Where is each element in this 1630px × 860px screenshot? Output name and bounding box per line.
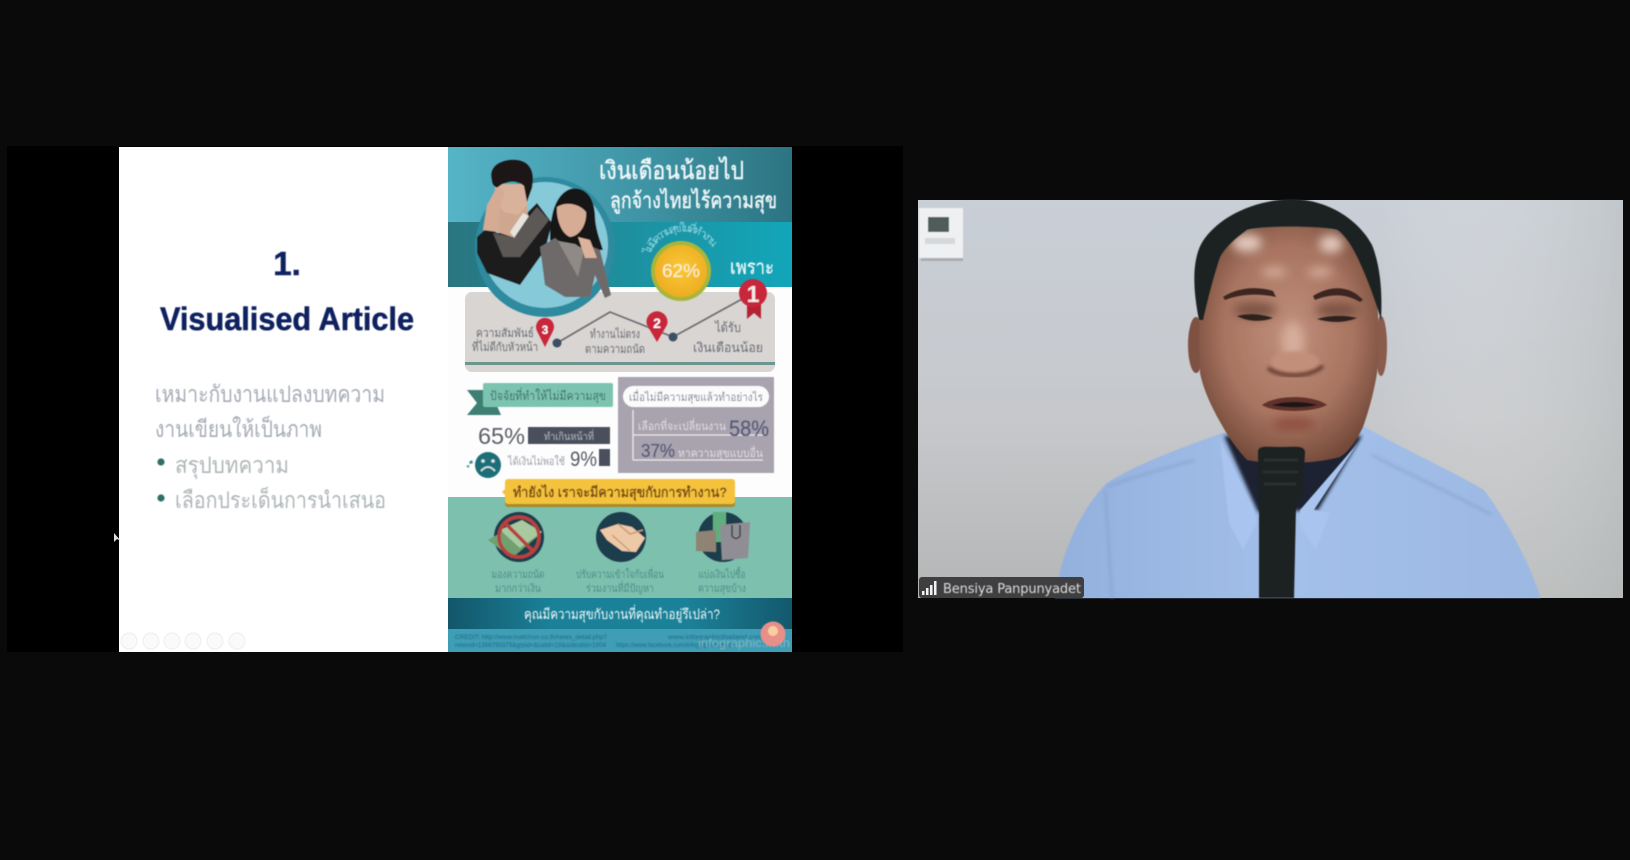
rank labels: ที่ไม่ดีกับหัวหน้า	[472, 338, 538, 354]
ribbon heading: factors	[467, 383, 613, 415]
ears	[1188, 317, 1204, 373]
wall background	[918, 200, 1623, 598]
person	[1055, 199, 1541, 598]
panel: what to do when unhappy: เมื่อไม่มีความสุขแล้วทำอย่างไร	[629, 389, 763, 404]
slide navigation controls	[121, 633, 245, 649]
tip labels: ร่วมงานที่มีปัญหา	[586, 580, 654, 595]
man	[477, 160, 552, 285]
footer credits: https://www.facebook.com/infographicthailand	[616, 642, 736, 649]
green tips section	[448, 497, 792, 598]
rank labels: เงินเดือนน้อย	[693, 340, 763, 355]
ranking line chart	[552, 293, 753, 348]
icon: handshake	[596, 512, 646, 562]
slide letterbox	[7, 146, 903, 652]
mouse cursor	[114, 533, 121, 542]
panel: what to do when unhappy: เลือกที่จะเปลี่ยนงาน	[638, 418, 726, 433]
wall thermostat	[919, 208, 963, 261]
tip labels: ปรับความเข้าใจกับเพื่อน	[576, 566, 664, 581]
shirt	[1055, 427, 1541, 598]
hair	[1194, 199, 1381, 320]
eye socket shadows	[1233, 302, 1359, 318]
tip labels: ความสุขบ้าง	[698, 583, 746, 595]
slide body text: สรุปบทความ	[175, 452, 289, 479]
header band lower	[448, 222, 792, 287]
bar: 65 percent: ทำเกินหน้าที่	[544, 429, 594, 443]
logo badge	[760, 622, 786, 646]
yellow question banner	[502, 479, 735, 507]
white body	[448, 287, 792, 498]
illustration: stressed man and woman in circle	[475, 160, 615, 317]
bar: 9 percent: ได้เงินไม่พอใช้	[507, 455, 565, 468]
slide body text: เลือกประเด็นการนำเสนอ	[175, 485, 386, 513]
bar: 9 percent: 9%	[570, 448, 597, 471]
rank pin 3	[536, 318, 554, 347]
nose	[1268, 322, 1323, 375]
panel: what to do when unhappy: 58%	[729, 416, 769, 441]
slide heading: Visualised Article	[160, 301, 414, 337]
collar	[1220, 440, 1257, 550]
curved label: no happiness at work: ไม่มีความสุขในที่ทำงาน	[640, 221, 717, 253]
rank labels: ได้รับ	[714, 320, 741, 335]
footer credits: newsid=1366793379&grpid=&catid=19&subcatid=1904	[455, 642, 606, 649]
icon: sad face	[466, 452, 501, 478]
panel: shared presentation slide	[7, 146, 903, 652]
face	[1199, 226, 1379, 463]
mouth	[1262, 397, 1327, 431]
infographic	[448, 147, 792, 652]
shirt seams	[1105, 455, 1492, 598]
rank labels: ตามความถนัด	[585, 342, 645, 356]
signal bars icon	[922, 581, 936, 595]
grey ranking panel	[465, 292, 775, 372]
footer credits: infographic.in.th	[698, 636, 790, 650]
bar: 65 percent: 65%	[478, 423, 525, 449]
panel: what to do when unhappy: หาความสุขแบบอื่น	[678, 445, 763, 460]
tip labels: มากกว่าเงิน	[495, 583, 541, 595]
panel: speaker video	[918, 199, 1623, 598]
yellow question banner: ทำยังไง เราจะมีความสุขกับการทำงาน?	[513, 483, 727, 501]
rank labels: ทำงานไม่ตรง	[590, 327, 640, 341]
rank labels: ความสัมพันธ์	[476, 326, 534, 340]
slide heading	[160, 245, 414, 337]
tip labels: แบ่งเงินไปซื้อ	[698, 566, 746, 581]
eyebrows	[1223, 288, 1363, 302]
footer credits: CREDIT: http://www.matichon.co.th/news_detail.php?	[455, 634, 607, 641]
tip labels: มองความถนัด	[492, 569, 544, 581]
slide heading: 1.	[273, 245, 301, 282]
ribbon heading: factors: ปัจจัยที่ทำให้ไม่มีความสุข	[490, 387, 606, 404]
woman	[540, 189, 611, 298]
eyes	[1237, 314, 1357, 322]
panel: what to do when unhappy: 37%	[641, 441, 675, 461]
rank labels	[472, 320, 763, 356]
stat badge 62%: 62%	[662, 261, 700, 281]
closing question bar: คุณมีความสุขกับงานที่คุณทำอยู่รึเปล่า?	[524, 605, 720, 623]
footer credits	[448, 629, 792, 652]
slide body text	[155, 381, 386, 513]
rank ribbon 1	[739, 279, 767, 319]
stat badge 62%	[651, 241, 711, 301]
infographic title	[599, 156, 777, 214]
icon: shopping bags	[696, 512, 750, 562]
name tag: Bensiya Panpunyadet	[943, 582, 1081, 597]
rank pin 2: 2	[653, 315, 661, 331]
infographic title: ลูกจ้างไทยไร้ความสุข	[610, 188, 777, 214]
infographic title: เงินเดือนน้อยไป	[599, 156, 744, 185]
header band top	[448, 147, 792, 222]
slide body text: งานเขียนให้เป็นภาพ	[155, 414, 322, 442]
icon: money crossed out	[488, 512, 544, 562]
bar: 9 percent	[507, 448, 610, 471]
footer credits: www.infographicthailand.com	[667, 634, 763, 641]
rank pin 3: 3	[542, 323, 549, 337]
bar: 65 percent	[478, 423, 610, 449]
name tag	[919, 577, 1084, 598]
rank ribbon 1: 1	[747, 281, 760, 307]
word: because: เพราะ	[730, 257, 774, 279]
rank pin 2	[646, 311, 668, 342]
slide body text: เหมาะกับงานแปลงบทความ	[155, 381, 385, 407]
tip labels	[492, 566, 746, 595]
panel: what to do when unhappy	[618, 377, 774, 473]
slide white page	[119, 147, 449, 652]
microphone	[1258, 447, 1305, 598]
closing question bar	[448, 598, 792, 629]
forehead highlights	[1232, 234, 1343, 277]
undershirt	[1224, 436, 1362, 512]
